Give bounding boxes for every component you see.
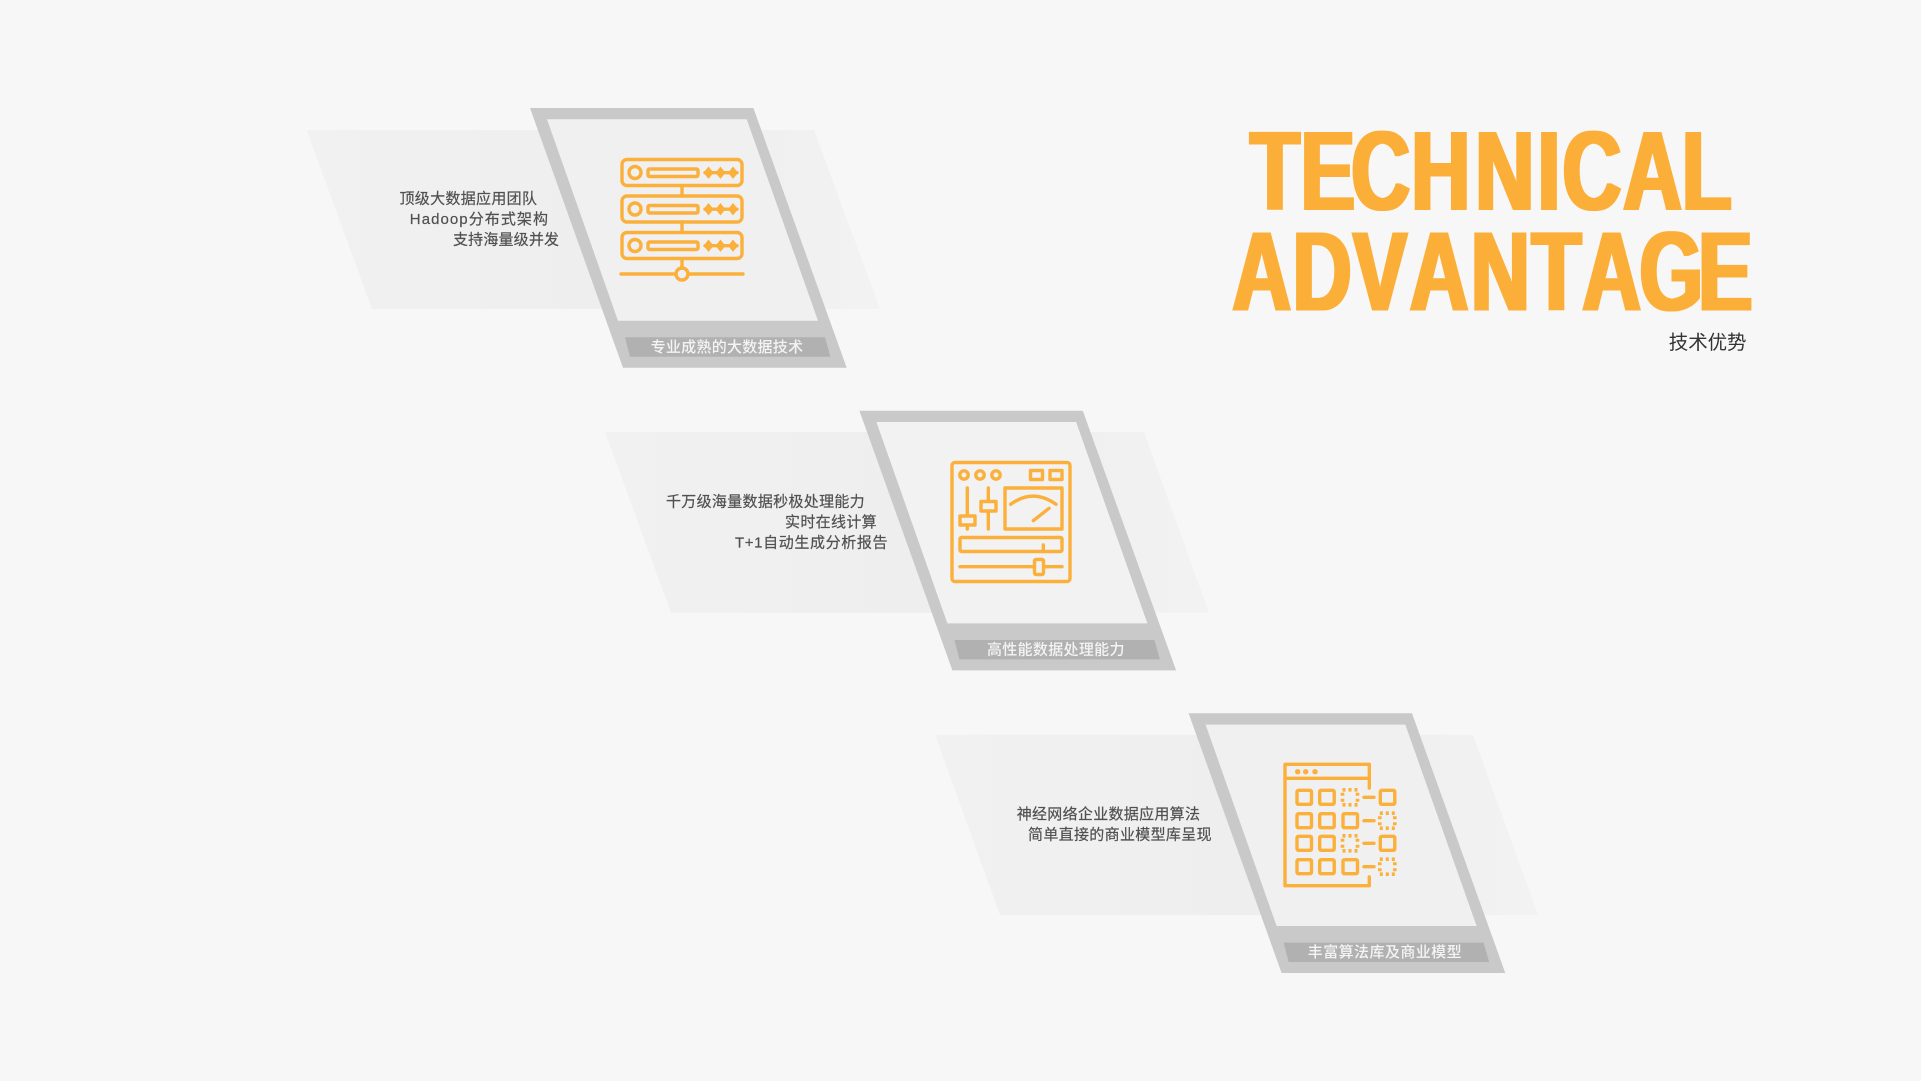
description text (400, 190, 559, 248)
description text: 实时在线计算 (785, 513, 877, 531)
card inner area (876, 422, 1147, 623)
subtitle: 技术优势 (1669, 332, 1746, 354)
icon: model library grid (1285, 764, 1395, 886)
card frame (859, 411, 1176, 670)
icon: control panel (952, 462, 1070, 582)
card inner area (547, 119, 818, 321)
description text: 支持海量级并发 (453, 232, 559, 248)
label bar (1284, 943, 1489, 962)
label text: 高性能数据处理能力 (987, 641, 1124, 658)
label bar (954, 640, 1160, 659)
description text: 千万级海量数据秒极处理能力 (666, 494, 865, 510)
description text (1017, 805, 1212, 844)
description text: Hadoop分布式架构 (410, 211, 548, 228)
label bar (625, 337, 830, 357)
description text: 简单直接的商业模型库呈现 (1028, 826, 1212, 844)
panel background band (935, 735, 1538, 915)
panel background band (605, 432, 1209, 613)
title: TECHNICAL (1250, 107, 1732, 234)
title: ADVANTAGE (1232, 207, 1753, 335)
icon: server rack (621, 160, 743, 280)
panel: algorithms and business models (935, 713, 1538, 973)
card frame (530, 108, 847, 368)
label text: 丰富算法库及商业模型 (1308, 943, 1462, 961)
description text (666, 494, 888, 552)
panel: big data technology (307, 108, 880, 368)
label text: 专业成熟的大数据技术 (651, 338, 803, 356)
card inner area (1206, 725, 1477, 926)
description text: T+1自动生成分析报告 (735, 534, 888, 552)
panel: high-performance processing (605, 411, 1209, 670)
description text: 神经网络企业数据应用算法 (1017, 805, 1200, 823)
card frame (1189, 713, 1505, 973)
panel background band (307, 130, 880, 309)
title (1232, 107, 1753, 335)
description text: 顶级大数据应用团队 (400, 190, 537, 208)
